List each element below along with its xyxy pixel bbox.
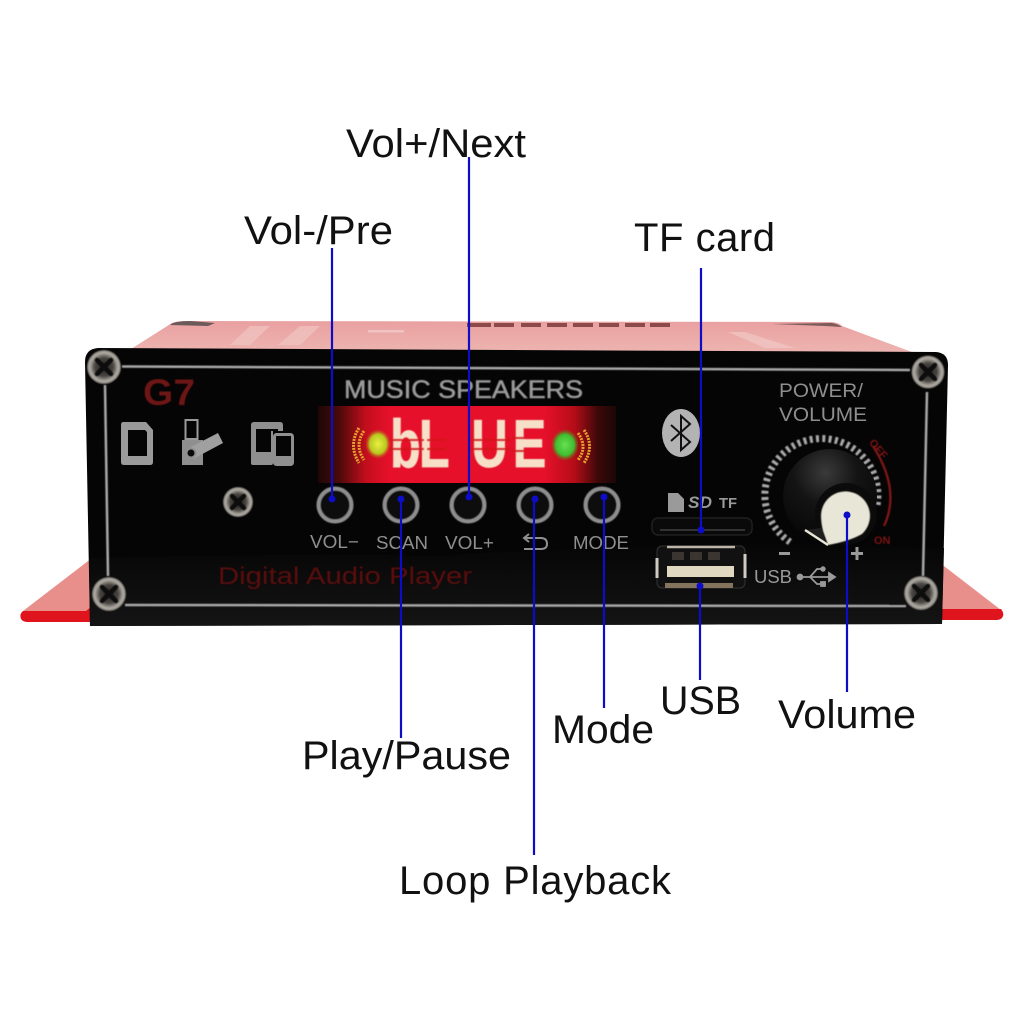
callout label: Vol-/Pre: Vol-/Pre [244, 209, 393, 253]
volume knob [783, 449, 877, 545]
knob pointer tip [805, 528, 826, 543]
leader: vol- pre [328, 248, 336, 502]
icon: usb trident [798, 567, 835, 586]
sd tf markings [668, 493, 737, 512]
sd tf markings: TF [719, 495, 737, 512]
callout label: USB: USB [660, 679, 741, 723]
button labels: VOL− [310, 531, 359, 552]
sd tf markings: SD [688, 493, 712, 512]
leader: usb [696, 582, 704, 680]
leader: mode [600, 494, 608, 708]
display readout text: bLUE [390, 406, 546, 482]
minus and plus marks [779, 547, 863, 560]
corner screws [87, 350, 944, 611]
top cover of the case [131, 321, 912, 352]
icon: usb flash drive [182, 420, 223, 465]
callout label: Mode: Mode [552, 708, 654, 752]
printed text: digital audio player: Digital Audio Player [218, 563, 472, 590]
LED display [318, 406, 616, 483]
volume scale ticks [765, 439, 878, 542]
red on off scale [866, 437, 891, 547]
panel border lines [105, 366, 927, 606]
TF card slot [652, 518, 752, 535]
button labels: MODE [573, 532, 629, 553]
button labels: VOL+ [445, 532, 494, 553]
leader: tf card [698, 268, 704, 534]
usb label: USB [754, 566, 792, 587]
red on off scale: ON [874, 535, 891, 547]
leader: play pause [398, 496, 404, 738]
knob label: power volume: POWER/ [779, 381, 864, 402]
right level indicator [551, 429, 590, 463]
callout label: Vol+/Next: Vol+/Next [346, 122, 526, 166]
callout label: Loop Playback: Loop Playback [399, 859, 672, 903]
leader: vol+ next [466, 157, 472, 500]
knob pointer cap [821, 491, 870, 545]
callout leader lines [328, 157, 850, 855]
left red mounting flange [20, 558, 92, 622]
USB port [657, 546, 745, 588]
brand label G7: G7 [143, 372, 195, 413]
button labels: SCAN [376, 532, 428, 553]
icon: tablet and phone [251, 422, 293, 465]
knob label: power volume [779, 381, 867, 426]
icon: loop return [524, 534, 547, 549]
red on off scale: OFF [866, 437, 890, 462]
black front panel [85, 348, 948, 626]
callout label: Play/Pause: Play/Pause [302, 734, 511, 778]
icon: memory card [121, 422, 153, 465]
knob label: power volume: VOLUME [779, 405, 867, 426]
left level indicator [354, 428, 391, 463]
leader: volume [844, 512, 850, 692]
leader: loop playback [532, 496, 538, 855]
icon: bluetooth [662, 409, 700, 457]
control buttons [318, 488, 618, 522]
right red mounting flange [940, 563, 1003, 620]
callout label: Volume: Volume [778, 693, 916, 737]
amplifier device [20, 321, 1003, 626]
callout label: TF card: TF card [634, 216, 775, 260]
usb label [754, 566, 835, 587]
button labels [310, 531, 629, 553]
panel title: music speakers: MUSIC SPEAKERS [344, 376, 583, 404]
